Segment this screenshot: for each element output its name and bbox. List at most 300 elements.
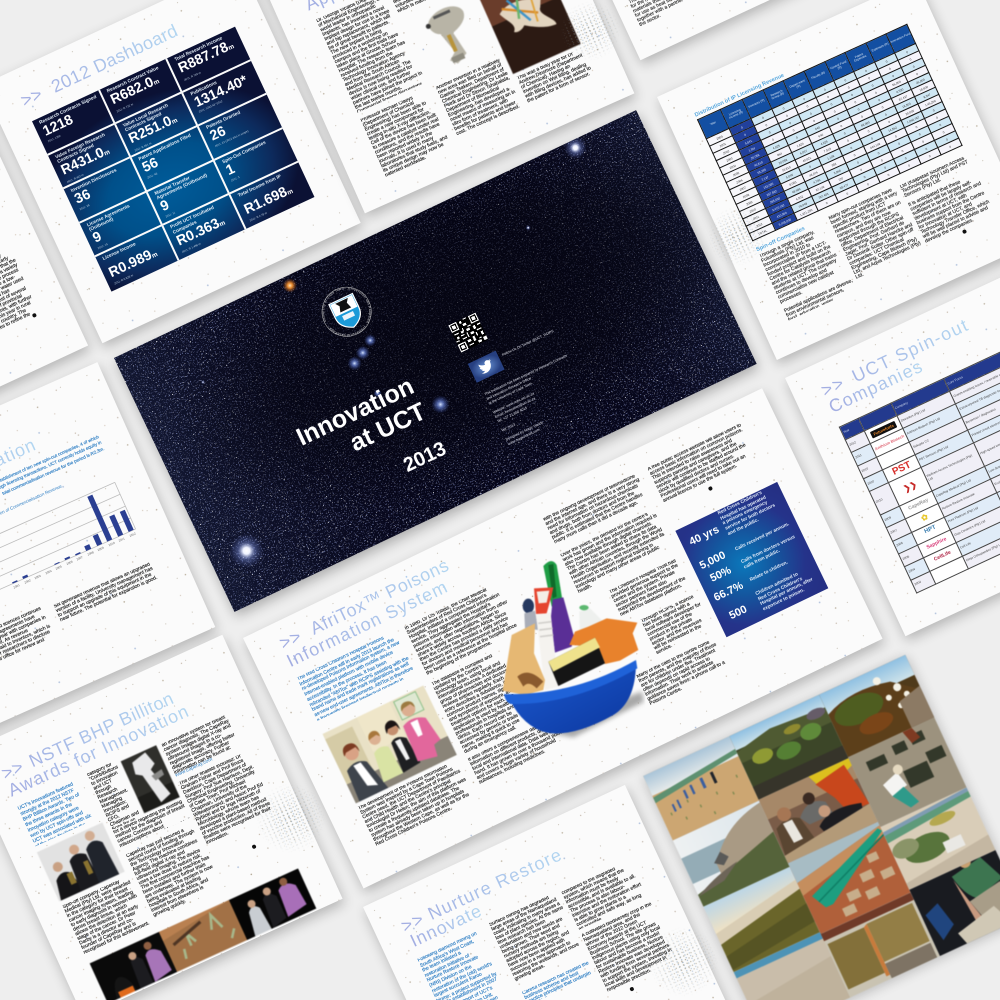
metric: value foreign research contracts: Value Foreign Research Contracts Signed bbox=[55, 133, 106, 165]
icon: end-of-article bullet bbox=[251, 844, 257, 849]
table: licensing revenue by year: 952 bbox=[831, 161, 837, 167]
photo tile: dune vegetation bbox=[880, 787, 996, 890]
panel: distribution of licensing revenue page bbox=[657, 0, 1000, 360]
table: licensing revenue by year: 0 bbox=[866, 182, 869, 186]
table: licensing revenue by year: 0 bbox=[802, 97, 806, 101]
panel: commercialisation chart page bbox=[0, 362, 215, 743]
text block: spin-off column three bbox=[899, 155, 991, 245]
table: spin-out companies bbox=[838, 352, 1000, 594]
table: licensing revenue by year: 0 bbox=[928, 154, 931, 158]
table: licensing revenue by year: 0 bbox=[812, 118, 816, 123]
fact text: calls per annum: Calls received per annum. bbox=[735, 522, 790, 552]
speckle cloud bbox=[0, 279, 9, 324]
table: licensing revenue by year: 0 bbox=[795, 135, 798, 139]
text block: lower right paragraph: Six generated revenue that allows an upgraded version of a facility. University management has to support an upgrade of this equipment in the near future. The potential for expansion is good. bbox=[53, 561, 158, 623]
table: spin-out companies: ✿ bbox=[920, 512, 930, 523]
table: licensing revenue by year: 0 bbox=[836, 116, 839, 121]
metric: publications bbox=[183, 61, 267, 126]
metric: value local research contracts bbox=[116, 92, 199, 158]
bar chart: commercialisation revenue 2001-2012: 2003 bbox=[34, 574, 42, 580]
table: licensing revenue by year: 1,321,260 bbox=[799, 208, 813, 217]
table: licensing revenue by year: 1.5M bbox=[748, 146, 755, 152]
table: spin-out companies: Futurefuels bbox=[873, 423, 894, 436]
table: licensing revenue by year: 1,824 bbox=[796, 141, 804, 148]
table: licensing revenue by year: 0 bbox=[877, 151, 880, 155]
table: spin-out companies: PST Sensors (Pty) Ltd bbox=[918, 445, 949, 462]
metric: value local research contracts: R251.0m bbox=[126, 113, 179, 147]
table: spin-out companies: 2004 bbox=[908, 567, 916, 574]
table: licensing revenue by year: 16,810 bbox=[781, 165, 791, 172]
table: spin-out companies: 2011 bbox=[855, 453, 862, 460]
icon: QR code bbox=[448, 312, 488, 352]
table: licensing revenue by year: 2006 bbox=[735, 178, 743, 184]
table: licensing revenue by year: 0 bbox=[833, 109, 836, 113]
table: licensing revenue by year: 153,085 bbox=[762, 181, 774, 189]
text block: third column top: an innovative system for breast cancer diagnosis. The CapeRay system images digital X-ray and ultrasound images in a co-registered image, offering better diagnostic accuracy. Further information can be found at: bbox=[161, 714, 236, 775]
photo: four women from the poisons centre bbox=[322, 685, 458, 804]
table: spin-out companies: Pure Platinum (Pty) Ltd bbox=[947, 506, 979, 524]
text block: publication credits: www.magichands.com bbox=[507, 428, 540, 446]
table: licensing revenue by year: 0 bbox=[871, 83, 874, 87]
table: licensing revenue by year: 2009 bbox=[745, 200, 753, 206]
metric: total income from IP: Total Income from IP bbox=[238, 175, 282, 199]
metric: profit UCT incubated companies: Profit UCT Incubated Companies bbox=[170, 206, 215, 235]
panel: far-left text page bbox=[0, 142, 94, 399]
heading: distribution of IP licensing revenue: Distribution of IP Licensing Revenue bbox=[694, 73, 785, 119]
table: spin-out companies: CapeRay Medical (Pty) Ltd bbox=[935, 478, 971, 498]
table: licensing revenue by year: 18,600 bbox=[919, 84, 929, 92]
table: licensing revenue by year: 7,510 bbox=[823, 146, 831, 153]
table: spin-out companies: Nurture Restore Innovate bbox=[941, 492, 975, 511]
table: licensing revenue by year: 5,045 bbox=[785, 172, 794, 179]
fact: 66.7%: 66.7% bbox=[712, 580, 745, 604]
table: licensing revenue by year: 0 bbox=[856, 160, 859, 164]
table: licensing revenue by year: 1,060,787 bbox=[906, 115, 920, 124]
table: licensing revenue by year: 8,547 bbox=[923, 92, 931, 99]
table: licensing revenue by year: 0 bbox=[904, 156, 907, 160]
table: licensing revenue by year: 6,530 bbox=[895, 87, 904, 94]
fact text: emergency service: a poisons emergency bbox=[722, 501, 769, 527]
text block: third column lower: A cultivated biodiversity crop in the Namaqualand area, and the winner of the 2012 Green Economy Awards at the UCT Business School. The site grows indigenous plants using only local labour and has become a model for sustainable business. Nurture Restore Innovate was developed with funding from several partners to support the system, investing in local skills and development in responsible precision. bbox=[581, 901, 673, 993]
text block: spin-off column one: Through a single company, Futurefuels (Pty) Ltd, was incorporated in 2010 to commercialise IP from a UCT-funded project and build on the Centre for Catalysis Research and the related group that trains students at UCT. The company continues to develop and commercialise new catalyst processes. bbox=[759, 229, 838, 305]
text block: third column lower: The other finalists included: Dr Graham Fisher and Prof Bruce Davidson, Cape Department of Surgery; Prof Sue Harrison, Dept. Chemical Engineering, University of Cape Town; Prof Michael Chapman, University of the Witwatersrand; and Assoc Prof Ed Rybicki and Dr Inga Hitzeroth of Microbiology, whose team has developed a plant-based method of vaccine production. All of these finalists were recognised for their innovation. bbox=[179, 753, 272, 846]
speckle cloud bbox=[651, 930, 714, 994]
speckle cloud bbox=[562, 4, 618, 58]
text block: column one second paragraph: Professor Michael Claeys (Department of Chemical Engineering) has been able to create a new component for testing in-situ X-ray diffraction. Cell of the device has been built to measure a catalyst under real conditions, and the results have been reported widely in the journals. It is used in many laboratories that study fuels, and its unique design may now be patented worldwide. bbox=[360, 95, 449, 177]
metric: total income from IP: R1.698m bbox=[242, 184, 294, 217]
table: licensing revenue by year: 0 bbox=[939, 122, 942, 127]
text block: publication credits: and Innovation Research Office bbox=[486, 376, 532, 401]
metric: value foreign research contracts: 2011: R 422 m bbox=[66, 172, 84, 184]
text block: fourth column top: A free public access website will allow users to access basic information on common poisons. This is intended to raise awareness and supports parents and caregivers, and the service will continue to be staffed around the clock by qualified doctors and nurses. Professional users will need to take out an annual licence to use the full system. bbox=[647, 422, 747, 504]
image: blue basin with cleaning products bbox=[502, 560, 645, 740]
table: licensing revenue by year: 1,128 bbox=[826, 154, 835, 160]
panel: top page with robotics applications bbox=[249, 0, 634, 213]
table: licensing revenue by year: 864 bbox=[776, 151, 783, 157]
bar chart: commercialisation revenue 2001-2012: 2008 bbox=[87, 550, 95, 557]
table: licensing revenue by year: 0 bbox=[888, 66, 891, 71]
text block: third column beside basin: Through RCIPS, a licence has been signed with a local software developer for commercial use of the product in the private sector, and the revenues will be reinvested in the service. bbox=[640, 594, 703, 656]
fact text: emergency service: Hospital has operated bbox=[720, 495, 767, 522]
fact text: children admitted: Hospital per annum, after bbox=[760, 578, 814, 607]
text block: spin-off column one bbox=[758, 229, 857, 321]
text block: publication credits: This publication has been prepared by Research Contracts bbox=[484, 354, 568, 396]
table: licensing revenue by year: 0 bbox=[874, 90, 877, 95]
metric: research contract value bbox=[100, 58, 183, 124]
table: licensing revenue by year: 410,000 bbox=[776, 210, 787, 219]
table: licensing revenue by year: 3,410,192 bbox=[771, 203, 785, 212]
text block: publication credits: Designed by Magic Hands bbox=[505, 420, 544, 442]
text block: blue intro: total commercialisation revenue for the period is R2.3m. bbox=[1, 446, 105, 496]
table: licensing revenue by year: 0 bbox=[843, 131, 846, 135]
table: licensing revenue by year: 0 bbox=[921, 139, 924, 143]
panel: AfriTox Poisons Information System spread bbox=[243, 388, 883, 888]
table: licensing revenue by year: 0 bbox=[885, 59, 888, 63]
metric: license agreements: 2011: 15 bbox=[97, 242, 108, 250]
table: licensing revenue by year: 0 bbox=[826, 94, 829, 99]
metric: material transfer agreements: Material Transfer Agreements (Outbound) bbox=[154, 174, 208, 201]
table: licensing revenue by year: 18,503 bbox=[901, 101, 911, 109]
table: licensing revenue by year: 0 bbox=[809, 111, 812, 115]
table: licensing revenue by year: 0 bbox=[850, 145, 853, 150]
table: licensing revenue by year: Inventors (R) bbox=[748, 98, 765, 109]
table: licensing revenue by year: 0 bbox=[880, 158, 883, 162]
photo tile: green nets and pots bbox=[788, 822, 911, 934]
table: licensing revenue by year: 0 bbox=[825, 201, 828, 205]
table: spin-out companies: ❯❯ bbox=[902, 480, 918, 494]
table: spin-out companies: 2006 bbox=[896, 541, 904, 548]
fact text: children admitted: Children admitted to bbox=[755, 572, 799, 597]
table: licensing revenue by year: 0 bbox=[945, 137, 948, 141]
text block: spin-off column two: Many spin-out companies have been formed, starting with a very specific product from UCT researchers. Two of them are on campus, and they are now supported through the RCIPS office, Department of Electrical Engineering, Prof. Gerhard de Jager, Prof. Gerhard Hancke and Dr Dominik Sutter. Other spin-off companies: UCT Chemical Engineering, Cape Biotech (Pty) Ltd, and Aqua Technologies (Pty) Ltd. bbox=[828, 187, 922, 281]
panel: NSTF BHP Billiton Awards page bbox=[0, 635, 343, 1000]
text block: publication credits: Email: innovation@uct.ac.za bbox=[494, 396, 536, 419]
table: spin-out companies: Biosensor / diagnostics bbox=[965, 407, 996, 424]
icon: end-of-article bullet bbox=[32, 313, 37, 318]
table: licensing revenue by year: 0 bbox=[935, 115, 938, 119]
table: licensing revenue by year: 0 bbox=[942, 130, 945, 134]
table: licensing revenue by year: 0 bbox=[860, 114, 863, 118]
bar chart: commercialisation revenue 2001-2012: 2006 bbox=[66, 559, 74, 566]
table: spin-out companies: Cell Life bbox=[959, 541, 972, 550]
metric: patents granted: 26 bbox=[208, 124, 229, 145]
table: licensing revenue by year: 0 bbox=[859, 167, 863, 172]
metric: license income: R0.989m bbox=[106, 247, 159, 281]
table: licensing revenue by year: 5,841 bbox=[744, 138, 752, 145]
table: licensing revenue by year: 87,437 bbox=[898, 94, 908, 101]
text block: column three: This was a busy year for Dr Andrew Dinsmore (Department of Chemical). Having an invention on Wet Bling, dealing with Bling devices, has added to the patent for a form of sensor. bbox=[517, 51, 592, 104]
fact text: children admitted bbox=[755, 572, 814, 612]
text block: second column bottom: CapeRay has just secured a second round of funding through the Technology Innovation Agency. The machine combines full-field digital X-ray and ultrasound imaging. The device uses a low dose to reduce risk. The first commercial machine has been installed and further trials are underway. The system is now being evaluated at leading hospitals in South Africa, and interest from elsewhere is growing quickly. bbox=[126, 828, 214, 918]
metric: value local research contracts: Value Local Research Contracts Signed bbox=[122, 103, 169, 133]
table: licensing revenue by year: 0 bbox=[847, 85, 850, 89]
photo tile: green hills bbox=[729, 694, 849, 800]
text block: third column bottom: Many of the calls to the centre come from parents, and the majority of those are for children under five. Treatment often depends on rapid access to information. Their work in antidote guidance saves lives: a phone call to a Poisons Centre. bbox=[636, 640, 726, 707]
table: licensing revenue by year: 2003 bbox=[725, 156, 733, 162]
panel: UCT Spin-out Companies page bbox=[785, 258, 1000, 636]
table: licensing revenue by year: 0 bbox=[806, 104, 809, 108]
table: licensing revenue by year: 2010 bbox=[749, 207, 756, 213]
heading: AfriTox line two: Information System bbox=[283, 576, 451, 671]
metric: total research income: R887.78m bbox=[176, 39, 236, 77]
table: licensing revenue by year: 0 bbox=[901, 148, 904, 153]
table: licensing revenue by year: 0 bbox=[905, 50, 909, 54]
text: follow us on Twitter: Follow Us On Twitter @UCT_RCIPS bbox=[501, 329, 554, 357]
metric: invention disclosures: 2011: 28 bbox=[79, 203, 90, 211]
fact text: children admitted: Red Cross Children's bbox=[757, 577, 803, 602]
table: licensing revenue by year: 0 bbox=[867, 129, 870, 133]
table: licensing revenue by year: 2002 bbox=[722, 149, 730, 155]
photo tile: people on sand bbox=[643, 736, 759, 841]
table: licensing revenue by year: 640 bbox=[814, 125, 820, 131]
fact: 5,000: 5,000 bbox=[698, 549, 728, 572]
table: licensing revenue by year: 0 bbox=[846, 138, 849, 142]
fact text: emergency service: and the public. bbox=[727, 518, 760, 537]
metric: invention disclosures bbox=[64, 158, 147, 223]
heading: spin-off companies: Spin-off Companies bbox=[755, 226, 806, 253]
table: licensing revenue by year: 2008 bbox=[742, 192, 750, 199]
text block: spin-off column three: Ltd (Kaapstad Southern Access Technologies (Pty) Ltd) and PST Sensors (Pty) Ltd. bbox=[899, 155, 969, 199]
table: licensing revenue by year: 49,696 bbox=[791, 187, 801, 194]
table: licensing revenue by year: 2004 bbox=[729, 163, 736, 170]
metric: total income from IP bbox=[237, 174, 294, 222]
text block: second column bottom: It also offers a comprehensive database of information on different products, drawing on local and international data. Data was added by hand. It has grown to over a thousand poisons and covers a huge variety of household substances, including medicines. bbox=[467, 717, 569, 786]
title line: at UCT: at UCT bbox=[345, 397, 430, 457]
table: licensing revenue by year: 20,058 bbox=[750, 153, 760, 160]
bar chart: commercialisation revenue 2001-2012: 2011 bbox=[118, 536, 126, 543]
table: spin-out companies: Sakopto CC bbox=[912, 438, 930, 449]
table: licensing revenue by year: Central Fund (R) bbox=[829, 59, 847, 70]
metric: material transfer agreements bbox=[147, 160, 231, 226]
table: licensing revenue by year: 0 bbox=[887, 172, 890, 177]
table: licensing revenue by year: 0 bbox=[853, 153, 856, 157]
metric: patents granted bbox=[199, 95, 283, 160]
fact: 50%: 50% bbox=[708, 564, 733, 585]
table: licensing revenue by year: 20,058 bbox=[778, 157, 788, 165]
table: licensing revenue by year: 97,149 bbox=[815, 184, 825, 192]
table: licensing revenue by year: 285,630 bbox=[769, 196, 781, 204]
metric: profit UCT incubated companies bbox=[163, 194, 247, 260]
heading: NSTF line two: Awards for Innovation bbox=[5, 701, 192, 800]
link: CapeRay website: www.caperay.com bbox=[174, 756, 213, 779]
table: licensing revenue by year: 297,582 bbox=[766, 189, 777, 197]
table: licensing revenue by year: 0 bbox=[854, 100, 857, 104]
table: licensing revenue by year: 5,455,000 bbox=[778, 217, 792, 226]
table: licensing revenue by year: Research Group (R) bbox=[770, 88, 785, 100]
table: spin-out companies: 2010 bbox=[875, 497, 883, 504]
fact text: emergency service: Red Cross Children's bbox=[717, 491, 763, 516]
table: licensing revenue by year: 5,966 bbox=[833, 168, 841, 175]
image: robotic hand bbox=[425, 6, 467, 64]
table: spin-out companies: Wolfram Access Technologies (Pty) Ltd bbox=[926, 453, 973, 481]
text block: column two: Another invention in a relatively new area was filed on behalf of Gaetan Tsakem. Department of Chemical Engineering. Dr Leslie Petrik and Dr Simon Tshabalala, Department of Biomedical Engineering, has developed a novel means of measuring an in vitro form of treatment, with benefits for patients and lower cost. The concept is described. bbox=[436, 58, 521, 137]
photo strip: award ceremony and plants bbox=[89, 868, 317, 1000]
bar chart: commercialisation revenue 2001-2012: 2001 bbox=[13, 583, 21, 590]
heading: Innovation at UCT bbox=[292, 372, 430, 457]
table: licensing revenue by year: 0 bbox=[830, 102, 833, 106]
table: licensing revenue by year: 6,037 bbox=[799, 148, 808, 155]
text block: second column top: In 1980, Dr DS Tobias, the Chief Medical Superintendent of Red Cross Children's Hospital, initiated a computerised information service. They aggregated the Hospital's poisons information with information from other sources, and, after negotiations, began to share it widely across southern Africa. Since then the Centre has provided a daily service for doctors and medical personnel and has been used as a reference at the hospital since the beginning of the programme. bbox=[404, 587, 518, 677]
table: licensing revenue by year: 720 bbox=[837, 176, 844, 182]
table: spin-out companies: 2004 bbox=[914, 580, 922, 587]
metric: total research income: Total Research Income bbox=[174, 36, 223, 63]
table: licensing revenue by year: 0 bbox=[894, 134, 897, 138]
photo tile: people in workshop bbox=[758, 758, 878, 864]
fact: 40 years: 40 yrs bbox=[687, 524, 721, 548]
metric: invention disclosures: 36 bbox=[72, 187, 93, 208]
table: licensing revenue by year: 0 bbox=[771, 137, 774, 141]
table: licensing revenue by year bbox=[696, 24, 963, 242]
table: licensing revenue by year: Depart-ment (R) bbox=[789, 78, 805, 89]
panel: 2012 Dashboard page bbox=[0, 0, 361, 343]
icon: end-of-article bullet bbox=[629, 986, 635, 992]
bar chart: commercialisation revenue 2001-2012: 2004 bbox=[45, 569, 53, 575]
metric: material transfer agreements: 2011: 11 bbox=[165, 210, 176, 218]
table: licensing revenue by year: 0 bbox=[840, 124, 843, 128]
metric: value foreign research contracts: R431.0m bbox=[59, 145, 111, 179]
bar chart: commercialisation revenue 2001-2012: 2010 bbox=[108, 541, 116, 547]
table: licensing revenue by year: 0 bbox=[918, 132, 921, 136]
table: spin-out companies: 2009 bbox=[883, 515, 892, 522]
table: spin-out companies: Anthium Biotech (Pty) Ltd bbox=[906, 417, 941, 436]
table: licensing revenue by year: 0 bbox=[891, 74, 895, 78]
table: licensing revenue by year: TOTAL bbox=[757, 228, 768, 236]
table: licensing revenue by year: 0 bbox=[857, 107, 860, 111]
table: licensing revenue by year: 0 bbox=[782, 106, 785, 110]
metric: total research income: 2011: R 745 m bbox=[183, 70, 201, 82]
icon: end-of-article bullet bbox=[962, 229, 967, 234]
fact text: doctors versus public: Calls from doctors versus bbox=[741, 535, 796, 565]
table: spin-out companies: CapeRay bbox=[907, 497, 929, 511]
metric: research contracts signed: Research Contracts Signed bbox=[39, 95, 98, 126]
table: licensing revenue by year: 40,021 bbox=[802, 155, 812, 163]
table: licensing revenue by year: 0 bbox=[915, 71, 918, 76]
table: licensing revenue by year: 0 bbox=[846, 191, 849, 195]
panel: night sky cover spread bbox=[114, 110, 757, 612]
table: spin-out companies: CellLife bbox=[933, 550, 952, 563]
fact text: children admitted: exposure to poison. bbox=[762, 588, 806, 612]
speckle cloud bbox=[258, 787, 322, 850]
icon: Twitter bird tile bbox=[468, 350, 504, 383]
table: licensing revenue by year: 2011 bbox=[752, 214, 760, 221]
table: licensing revenue by year: 0 bbox=[844, 78, 847, 82]
table: licensing revenue by year: 4,706 bbox=[812, 177, 821, 184]
bar chart: commercialisation revenue 2001-2012: 2005 bbox=[55, 564, 63, 571]
table: licensing revenue by year: 0 bbox=[877, 98, 881, 102]
text block: third column beside bottles: The Children's Hospital Trust has provided generous support to the centre and the system. Private sector partners have also supported the development of the new AfriTox database platform. bbox=[609, 558, 687, 618]
table: licensing revenue by year: 55,285 bbox=[757, 167, 767, 175]
table: licensing revenue by year: 0 bbox=[788, 120, 792, 125]
heading: year 2013: 2013 bbox=[400, 438, 450, 477]
fact text: relate to children: Relate to children. bbox=[749, 561, 789, 583]
table: licensing revenue by year: 6,502 bbox=[795, 194, 804, 201]
photo tile: men kneeling with sacks bbox=[908, 850, 1000, 956]
table: licensing revenue by year: 640 bbox=[817, 132, 824, 138]
table: licensing revenue by year: 0 bbox=[768, 130, 771, 134]
bar chart: commercialisation revenue 2001-2012 bbox=[0, 482, 137, 590]
fact text: emergency service: service for both doctors bbox=[725, 503, 776, 532]
table: licensing revenue by year: 0 bbox=[915, 125, 918, 129]
metric: publications: 2011: 1263.43 *2012 bbox=[198, 99, 223, 114]
table: licensing revenue by year: 0 bbox=[867, 76, 871, 80]
metric: patent applications filed: 56 bbox=[140, 155, 161, 176]
table: licensing revenue by year: 797,403 bbox=[817, 191, 829, 200]
table: licensing revenue by year: 0 bbox=[881, 105, 884, 109]
photo tile: marsh at dusk bbox=[704, 867, 820, 972]
table: licensing revenue by year: 0 bbox=[863, 175, 866, 179]
table: licensing revenue by year: 0 bbox=[925, 146, 928, 151]
table: licensing revenue by year: 0 bbox=[912, 64, 915, 69]
text block: publication credits: Website: www.rcips.uct.ac.za bbox=[492, 391, 535, 414]
metric: material transfer agreements: 9 bbox=[158, 197, 172, 215]
table: licensing revenue by year: 0 bbox=[864, 68, 867, 73]
text block: third column second paragraph: Over the years, the demand for the centre's work has grown and the information required is also now available through digital channels. The Centre has been asked to share its data with other African countries, through the World Health Organisation, and recently extended its resources to support regional training in toxicology and many other areas of public health. bbox=[560, 512, 665, 594]
table: licensing revenue by year: 0 bbox=[785, 113, 788, 118]
table: licensing revenue by year: 0 bbox=[887, 119, 891, 124]
bar chart: commercialisation revenue 2001-2012: 2007 bbox=[76, 555, 84, 561]
table: licensing revenue by year: 7,137 bbox=[761, 175, 769, 181]
panel: Nurture Restore Innovate page bbox=[363, 785, 745, 1000]
table: licensing revenue by year: 48,076 bbox=[808, 170, 818, 177]
bar chart: commercialisation revenue 2001-2012: 2012 bbox=[129, 531, 137, 538]
fact text: emergency service bbox=[717, 491, 776, 537]
metric: total income from IP: 2011: R 2.78 m bbox=[249, 211, 268, 222]
metric: license income: 2011: R 0.828 m bbox=[114, 273, 134, 286]
table: licensing revenue by year: 2000 bbox=[715, 134, 723, 140]
speckle cloud bbox=[711, 209, 765, 263]
heading: second line: Companies bbox=[826, 356, 926, 417]
table: spin-out companies: Company bbox=[894, 400, 908, 410]
table: spin-out companies: Devantus (Pty) Ltd bbox=[900, 408, 926, 423]
text block: first column lower: The development of the Poisons Information System was inspired by a Cape Town Poisons Centre need, the UCT Department of Paediatrics and Child Health and the Centre's principal toxicologist Dr Helen; the aim of this platform was to create a frequently updated database. The system has already been taken up in hospitals throughout the Western Cape, as well as for the Red Cross Children's Poisons Centre. bbox=[358, 764, 470, 847]
metric: patents granted: 2011: 22 (2012 also in scope) bbox=[214, 129, 249, 148]
table: licensing revenue by year: 26,000 bbox=[915, 77, 925, 85]
photo tile: seedling nursery bbox=[848, 717, 967, 828]
metric: invention disclosures: Invention Disclosures bbox=[70, 169, 118, 194]
text block: publication credits: Ver. 2013 bbox=[501, 423, 516, 433]
metric: value foreign research contracts bbox=[48, 124, 131, 189]
metric: value local research contracts: 2011: R 281 m bbox=[134, 141, 152, 152]
table: licensing revenue by year: 20,035 bbox=[905, 108, 915, 116]
table: licensing revenue by year: 0 bbox=[909, 57, 912, 61]
metric: license agreements: License Agreements (Outbound) bbox=[86, 204, 131, 233]
table: licensing revenue by year: 0 bbox=[740, 125, 743, 129]
metric: research contracts signed: 1218 bbox=[40, 112, 76, 140]
text block: spin-off column three: It is anticipated that these companies will be largely self-sufficient in terms of research and development at UCT, with business support from the Centre for Innovation at UCT, and Technology Transfer Office, which will be well placed to advise and develop the companies. bbox=[907, 179, 991, 245]
panel: top-right text page bbox=[520, 0, 899, 60]
table: licensing revenue by year: Licensing Income (R) bbox=[728, 107, 744, 120]
table: licensing revenue by year: 0 bbox=[948, 144, 952, 149]
table: spin-out companies: Core Focus bbox=[947, 375, 963, 385]
table: licensing revenue by year: Faculty (R) bbox=[811, 71, 826, 80]
table: licensing revenue by year: 14,562 bbox=[887, 125, 897, 133]
metric: spin-out companies: Spin-Out Companies bbox=[222, 141, 267, 165]
photo tile: seed beds bbox=[820, 892, 940, 997]
metric: profit UCT incubated companies: R0.363m bbox=[174, 215, 227, 249]
table: licensing revenue by year: 0 bbox=[884, 112, 887, 116]
bar chart: commercialisation revenue 2001-2012: 2002 bbox=[24, 578, 32, 585]
table: spin-out companies: HPT bbox=[924, 525, 937, 535]
fact: 500: 500 bbox=[727, 603, 749, 622]
photo tile: backlit plant with flowers bbox=[818, 654, 935, 758]
table: licensing revenue by year: 0 bbox=[743, 132, 747, 137]
table: spin-out companies: 2012 bbox=[848, 440, 857, 447]
photo tile: dune and excavator bbox=[673, 800, 790, 907]
table: licensing revenue by year: 46,810 bbox=[753, 160, 763, 167]
table: spin-out companies: 2006 bbox=[902, 554, 910, 561]
metric: profit UCT incubated companies: 2011: R 1.498 m bbox=[181, 242, 202, 254]
table: licensing revenue by year: Expenses (R) bbox=[871, 42, 889, 53]
